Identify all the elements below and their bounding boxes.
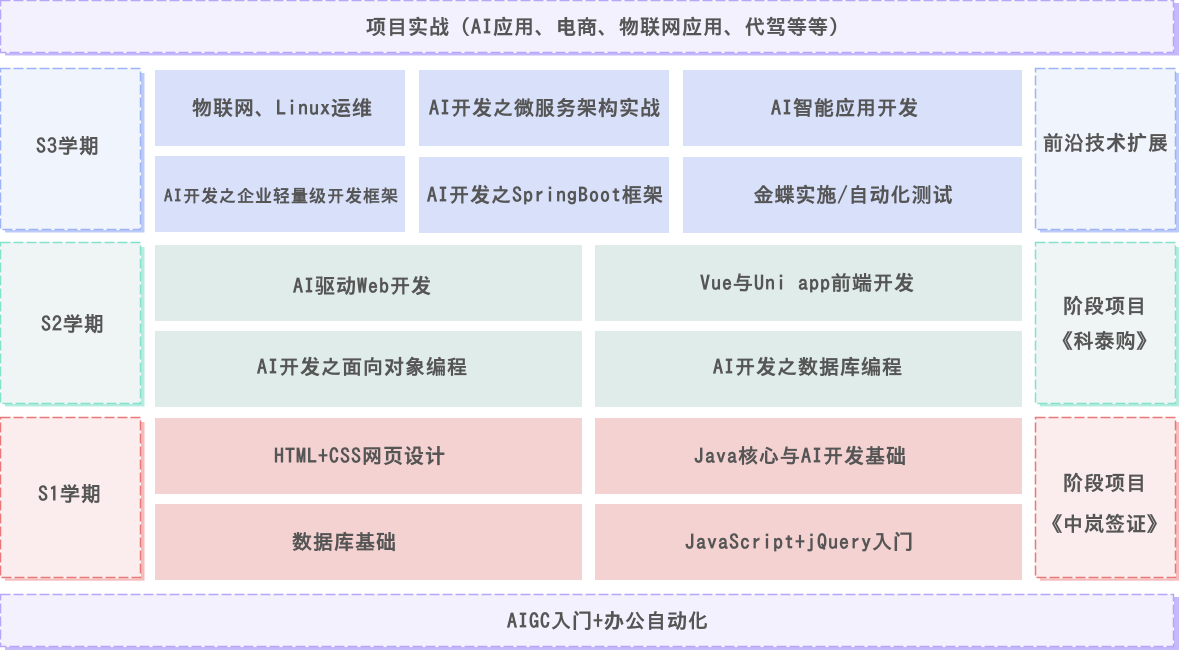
card: AI-driven Web: AI驱动Web开发 (292, 275, 432, 296)
card: enterprise framework (155, 156, 405, 232)
panel: S2 semester label (0, 242, 144, 406)
panel: frontier technology extension: 前沿技术扩展 (1043, 132, 1169, 153)
panel: S2 semester label: S2学期 (41, 313, 105, 334)
card: Java core: Java核心与AI开发基础 (694, 445, 907, 466)
panel: frontier technology extension (1035, 68, 1179, 232)
panel: top banner project practice: 项目实战（AI应用、电商、物联网应用、代驾等等） (366, 15, 850, 37)
card: database basics: 数据库基础 (292, 531, 397, 552)
card: IoT and Linux: 物联网、Linux运维 (192, 97, 373, 118)
card: AI applications (683, 70, 1022, 146)
card: SpringBoot (419, 157, 669, 233)
card: JavaScript and jQuery: JavaScript+jQuery入门 (685, 531, 914, 552)
panel: bottom banner AIGC: AIGC入门+办公自动化 (506, 610, 709, 631)
card: AI microservices: AI开发之微服务架构实战 (428, 96, 661, 118)
card: JavaScript and jQuery (595, 504, 1022, 580)
panel: S3 semester label (0, 68, 144, 232)
panel: top banner project practice (0, 0, 1179, 56)
panel: S1 semester label: S1学期 (38, 483, 102, 504)
panel: S2 stage project (1035, 242, 1179, 406)
card: database basics (155, 504, 582, 580)
card: Vue and Uni app (595, 245, 1022, 321)
card: enterprise framework: AI开发之企业轻量级开发框架 (163, 186, 399, 205)
panel: S1 stage project: 阶段项目 (1063, 471, 1147, 493)
card: Java core (595, 418, 1022, 494)
panel: S2 stage project: 阶段项目 (1063, 294, 1147, 316)
panel: S3 semester label: S3学期 (36, 135, 100, 156)
card: Vue and Uni app: Vue与Uni app前端开发 (700, 272, 915, 293)
panel: bottom banner AIGC (0, 594, 1179, 650)
card: IoT and Linux (155, 70, 405, 146)
panel: S1 stage project (1035, 417, 1179, 581)
card: Kingdee and automated testing: 金蝶实施/自动化测试 (754, 183, 954, 205)
card: AI applications: AI智能应用开发 (770, 96, 919, 118)
panel: S3 course grid (155, 70, 1022, 233)
card: AI microservices (419, 70, 669, 146)
card: database programming (595, 331, 1022, 407)
panel: S1 semester label (0, 417, 144, 581)
card: AI-driven Web (155, 245, 582, 321)
card: database programming: AI开发之数据库编程 (712, 355, 903, 377)
panel: S1 course grid (155, 418, 1022, 580)
panel: S1 stage project: 《中岚签证》 (1042, 513, 1168, 534)
card: OOP: AI开发之面向对象编程 (256, 355, 468, 377)
panel: S2 course grid (155, 245, 1022, 407)
card: HTML and CSS: HTML+CSS网页设计 (274, 445, 446, 466)
panel: S2 stage project: 《科泰购》 (1052, 330, 1158, 351)
card: SpringBoot: AI开发之SpringBoot框架 (426, 184, 664, 205)
card: Kingdee and automated testing (683, 157, 1022, 233)
card: HTML and CSS (155, 418, 582, 494)
card: OOP (155, 331, 582, 407)
